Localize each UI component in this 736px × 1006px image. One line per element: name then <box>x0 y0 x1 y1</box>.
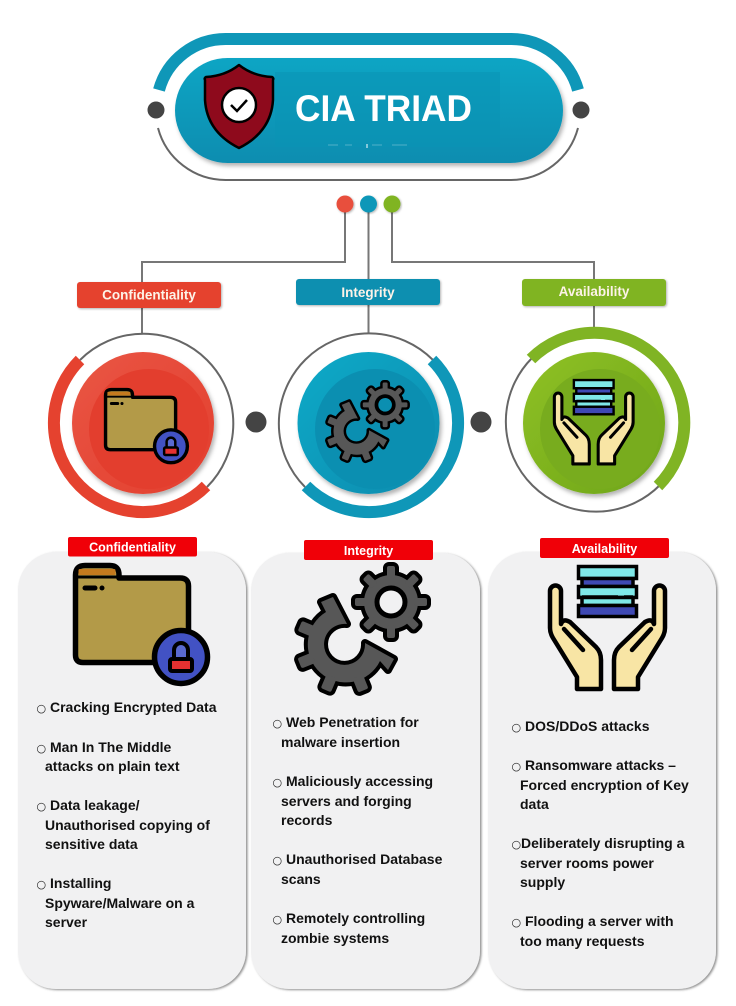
icon: gears large <box>298 566 427 692</box>
list: integrity threats: servers and forging <box>281 793 412 809</box>
list: availability threats: supply <box>520 874 565 890</box>
tag: Availability <box>522 279 666 306</box>
header: outer teal arc <box>159 39 578 90</box>
panel: Confidentiality <box>18 537 246 989</box>
list: integrity threats: ○ <box>272 854 282 867</box>
list: integrity threats: ○ <box>272 717 282 730</box>
dot between circles left <box>246 412 266 432</box>
list: availability threats <box>512 718 689 949</box>
label: Integrity: Integrity <box>344 544 393 558</box>
list: confidentiality threats: Man In The Middle <box>50 739 172 755</box>
icon: shield with check mark <box>205 65 273 148</box>
list: confidentiality threats: Unauthorised copying of <box>45 817 210 833</box>
list: availability threats: ○ <box>512 838 521 851</box>
list: availability threats: Forced encryption of Key <box>520 777 689 793</box>
list: availability threats: ○ <box>512 760 521 773</box>
list: availability threats: server rooms power <box>520 855 654 871</box>
tag: Confidentiality <box>77 282 221 308</box>
list: availability threats: Ransomware attacks – <box>525 757 676 773</box>
list: confidentiality threats: ○ <box>36 878 46 891</box>
header: lower grey arc <box>158 128 578 180</box>
label: Availability <box>540 538 669 558</box>
title banner <box>175 58 563 163</box>
list: confidentiality threats: sensitive data <box>45 836 138 852</box>
icon: gears <box>327 383 407 461</box>
tag: Availability: Availability <box>559 284 630 299</box>
list: availability threats: data <box>520 796 549 812</box>
teal node <box>360 196 377 212</box>
tag: Integrity <box>296 279 440 305</box>
list: confidentiality threats: ○ <box>36 742 46 755</box>
list: availability threats: too many requests <box>520 933 645 949</box>
list: confidentiality threats: Spyware/Malware on a <box>45 895 195 911</box>
icon: folder with padlock <box>106 390 187 463</box>
label: Availability: Availability <box>572 542 637 556</box>
panel: Availability <box>488 538 716 989</box>
list: confidentiality threats <box>36 699 217 930</box>
list: confidentiality threats: Cracking Encrypted Data <box>50 699 217 715</box>
list: confidentiality threats: Installing <box>50 875 111 891</box>
circle: Integrity <box>279 333 458 512</box>
list: integrity threats <box>272 714 443 946</box>
panel: Integrity <box>251 540 480 989</box>
green node <box>384 196 400 212</box>
icon: hands holding server <box>554 380 633 464</box>
header: right connector dot <box>572 102 590 118</box>
list: availability threats: Deliberately disrupting a <box>521 835 685 851</box>
red node <box>336 196 354 212</box>
list: confidentiality threats: ○ <box>36 702 46 715</box>
tag: Confidentiality: Confidentiality <box>102 288 196 302</box>
list: confidentiality threats: Data leakage/ <box>50 797 140 813</box>
tag: Integrity: Integrity <box>341 285 395 300</box>
list: availability threats: ○ <box>512 916 521 929</box>
circle: Availability <box>506 333 684 512</box>
list: availability threats: DOS/DDoS attacks <box>525 718 650 734</box>
list: integrity threats: ○ <box>272 776 282 789</box>
label: Confidentiality <box>68 537 197 556</box>
connector lines <box>142 212 594 333</box>
dot between circles right <box>470 412 492 432</box>
list: availability threats: ○ <box>512 721 521 734</box>
circle: Confidentiality <box>54 334 233 512</box>
list: integrity threats: ○ <box>272 913 282 926</box>
list: confidentiality threats: server <box>45 914 88 930</box>
list: integrity threats: malware insertion <box>281 734 400 750</box>
list: integrity threats: Unauthorised Database <box>286 851 443 867</box>
label: Integrity <box>304 540 433 560</box>
title text: CIA TRIAD <box>295 88 472 129</box>
list: integrity threats: Remotely controlling <box>286 910 425 926</box>
list: integrity threats: Maliciously accessing <box>286 773 433 789</box>
list: confidentiality threats: ○ <box>36 800 46 813</box>
list: integrity threats: Web Penetration for <box>286 714 419 730</box>
list: integrity threats: zombie systems <box>281 930 389 946</box>
list: confidentiality threats: attacks on plain text <box>45 758 180 774</box>
list: integrity threats: records <box>281 812 333 828</box>
list: availability threats: Flooding a server with <box>525 913 674 929</box>
label: Confidentiality: Confidentiality <box>89 540 176 554</box>
icon: hands holding server large <box>550 566 665 689</box>
list: integrity threats: scans <box>281 871 321 887</box>
header: left connector dot <box>148 102 164 118</box>
icon: folder with padlock large <box>76 566 208 684</box>
